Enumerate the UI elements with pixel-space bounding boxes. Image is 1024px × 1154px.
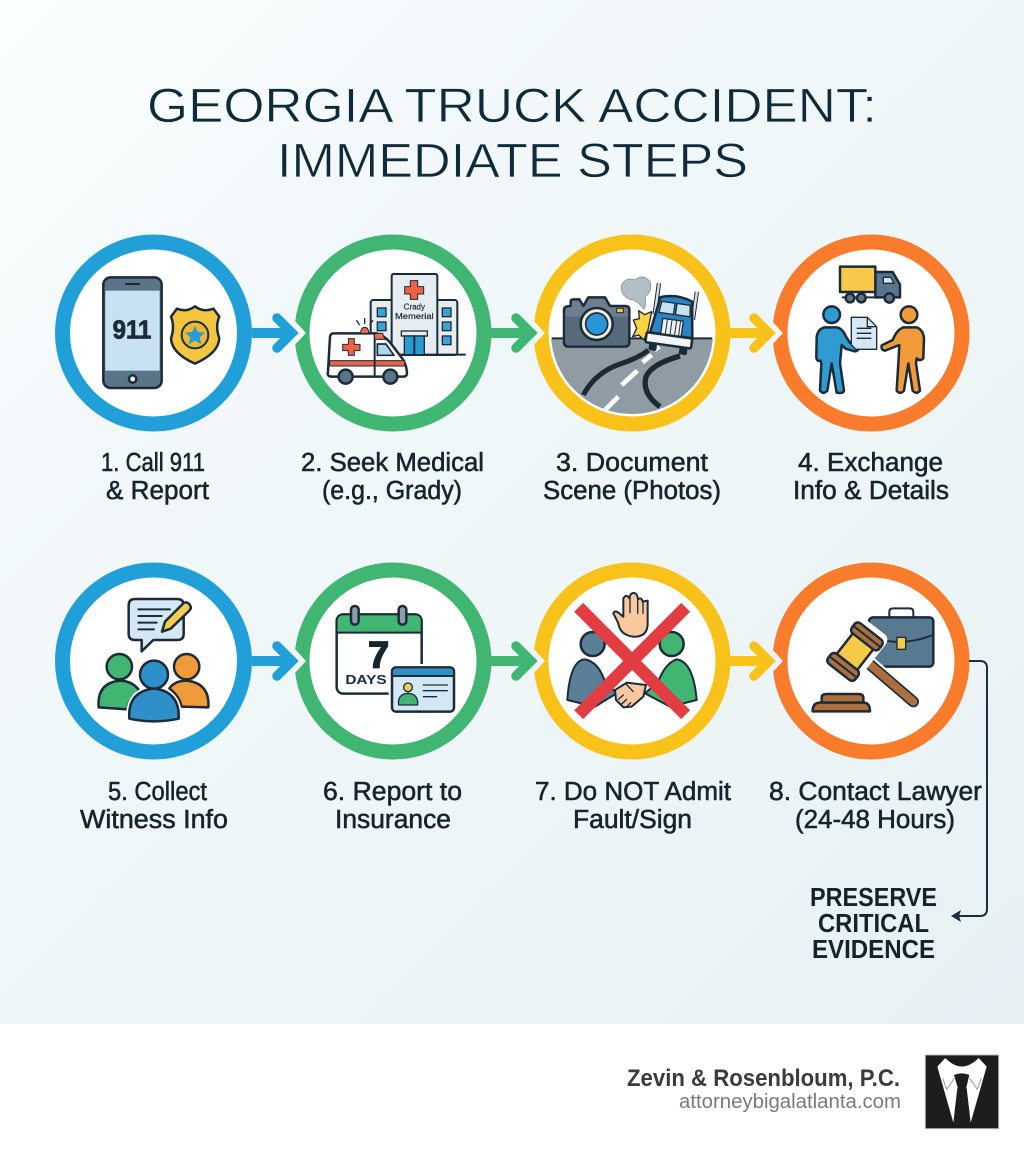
label: step 4: Info & Details xyxy=(793,477,949,505)
crash burst xyxy=(633,311,652,340)
person right xyxy=(881,306,924,393)
witness blue xyxy=(129,661,179,721)
label: step 1: 1. Call 911 xyxy=(101,449,205,477)
logo: suit and tie xyxy=(925,1055,999,1129)
callout: preserve critical evidence xyxy=(810,882,937,964)
title: IMMEDIATE STEPS xyxy=(277,134,748,188)
person right xyxy=(645,632,697,707)
icon: camera, truck crash and skid marks xyxy=(550,277,713,418)
label: step 3 xyxy=(543,449,721,505)
red cross xyxy=(579,607,686,715)
truck xyxy=(644,282,699,356)
step 4 ring xyxy=(780,242,962,424)
person left xyxy=(567,632,617,707)
label: step 7: Fault/Sign xyxy=(573,806,692,834)
label: step 2: (e.g., Grady) xyxy=(322,477,462,505)
icon: gavel and briefcase xyxy=(813,608,933,711)
label: step 8: 8. Contact Lawyer xyxy=(769,778,983,806)
footer firm name and url xyxy=(627,1065,901,1113)
label: step 6: 6. Report to xyxy=(323,778,462,806)
label: step 2: 2. Seek Medical xyxy=(301,449,484,477)
icon: hospital and ambulance xyxy=(328,274,465,384)
label: step 1 xyxy=(101,449,209,505)
road xyxy=(550,338,713,418)
title: GEORGIA TRUCK ACCIDENT: xyxy=(147,79,877,133)
delivery truck xyxy=(875,272,900,297)
icon: hospital and ambulance: Memerial xyxy=(395,312,434,321)
label: step 3: Scene (Photos) xyxy=(543,477,721,505)
connector arrow to evidence note xyxy=(951,661,987,922)
person left xyxy=(816,306,859,393)
witness green xyxy=(99,654,140,709)
step 6 ring xyxy=(302,570,484,752)
callout: preserve critical evidence: EVIDENCE xyxy=(812,934,935,964)
icon: crossed out handshake and stop hand xyxy=(567,593,697,715)
handle xyxy=(867,662,913,702)
icon: seven day calendar and ID card: DAYS xyxy=(345,673,387,687)
label: step 4: 4. Exchange xyxy=(798,449,943,477)
icon: truck and two people exchanging a document xyxy=(816,267,924,393)
pencil xyxy=(162,602,191,632)
camera xyxy=(564,297,629,347)
gavel head xyxy=(823,618,887,685)
arrow: step 6 to 7 xyxy=(491,646,545,676)
label: step 5 xyxy=(80,778,228,834)
footer firm name and url: Zevin & Rosenbloum, P.C. xyxy=(627,1065,900,1092)
label: step 1: & Report xyxy=(106,477,209,505)
label: step 4 xyxy=(793,449,949,505)
arrow: step 7 to 8 xyxy=(729,646,783,676)
label: step 2 xyxy=(301,449,484,505)
witness orange xyxy=(169,654,208,707)
callout: preserve critical evidence: CRITICAL xyxy=(818,908,929,938)
icon: seven day calendar and ID card xyxy=(337,606,457,715)
speech bubble xyxy=(129,599,184,651)
handshake xyxy=(615,683,646,707)
label: step 5: Witness Info xyxy=(80,806,228,834)
step 8 ring xyxy=(780,570,962,752)
sounding block xyxy=(822,694,863,703)
icon: seven day calendar and ID card: 7 xyxy=(368,633,389,675)
label: step 7: 7. Do NOT Admit xyxy=(535,778,731,806)
step 2 ring xyxy=(302,242,484,424)
arrow: step 2 to 3 xyxy=(491,318,545,348)
arrow: step 1 to 2 xyxy=(252,318,306,348)
label: step 7 xyxy=(535,778,731,834)
arrow: step 5 to 6 xyxy=(252,646,306,676)
step 7 ring xyxy=(541,570,723,752)
title xyxy=(147,79,877,188)
document xyxy=(851,317,877,349)
label: step 8: (24-48 Hours) xyxy=(795,806,955,834)
footer bar xyxy=(0,1024,1024,1154)
icon: phone 911 and police badge xyxy=(103,277,219,388)
icon: hospital and ambulance: Crady xyxy=(404,303,425,312)
step 3 ring xyxy=(541,242,723,424)
footer firm name and url: attorneybigalatlanta.com xyxy=(679,1091,901,1113)
label: step 8 xyxy=(769,778,983,834)
icon: phone 911 and police badge: 911 xyxy=(113,316,151,344)
smoke xyxy=(621,277,651,309)
label: step 3: 3. Document xyxy=(556,449,708,477)
label: step 5: 5. Collect xyxy=(108,778,207,806)
briefcase xyxy=(889,608,913,617)
raised hand xyxy=(613,593,648,637)
callout: preserve critical evidence: PRESERVE xyxy=(810,882,937,912)
arrow: step 3 to 4 xyxy=(729,318,783,348)
label: step 6: Insurance xyxy=(335,806,451,834)
step 1 ring xyxy=(62,242,244,424)
icon: witnesses and statement bubble xyxy=(99,599,208,721)
label: step 6 xyxy=(323,778,462,834)
step 5 ring xyxy=(62,570,244,752)
